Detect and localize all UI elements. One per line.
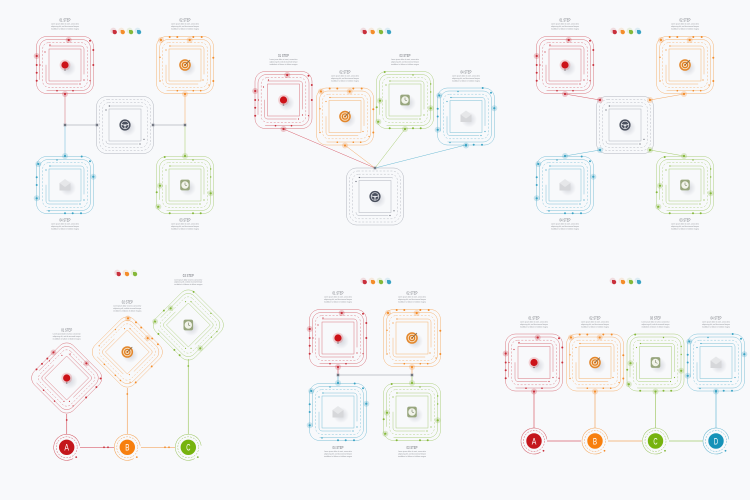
label 04: 04 STEP — [460, 69, 472, 74]
label 01: 01 STEP — [332, 290, 344, 295]
label 03: 03 STEP — [650, 315, 661, 320]
label 03: adipiscing elit, sed do eiusmod tempor — [398, 452, 426, 455]
label 02: Lorem ipsum dolor sit amet, consectetur — [398, 296, 426, 299]
label 02: incididunt ut labore et dolore magna — [171, 27, 200, 30]
label 04: incididunt ut labore et dolore magna — [51, 227, 80, 230]
label 02: adipiscing elit, sed do eiusmod tempor — [113, 307, 142, 310]
node B: B — [593, 436, 597, 447]
label 03: incididunt ut labore et dolore magna — [642, 325, 670, 328]
label 01: adipiscing elit, sed do eiusmod tempor — [53, 335, 81, 338]
step card 02 — [566, 334, 624, 394]
label 02: incididunt ut labore et dolore magna — [581, 325, 610, 328]
step card 01 — [252, 72, 313, 132]
label 04: Lorem ipsum dolor sit amet, consectetur — [324, 450, 352, 453]
label 03: adipiscing elit, sed do eiusmod tempor — [671, 225, 699, 228]
step card 02 — [384, 309, 441, 370]
node B — [110, 430, 145, 465]
label 01: Lorem ipsum dolor sit amet, consectetur — [551, 23, 579, 26]
legend marks — [360, 278, 391, 284]
label 01: 01 STEP — [528, 315, 540, 320]
label 02: Lorem ipsum dolor sit amet, consectetur — [581, 321, 609, 324]
label 03: Lorem ipsum dolor sit amet, consectetur — [174, 278, 203, 281]
label 03: adipiscing elit, sed do eiusmod tempor — [171, 225, 199, 228]
label 03: 03 STEP — [180, 217, 191, 222]
diamond step 01 — [27, 337, 106, 417]
panel: hub with diagonal links — [534, 17, 714, 230]
label 03: Lorem ipsum dolor sit amet, consectetur — [671, 223, 699, 226]
label 01: Lorem ipsum dolor sit amet, consectetur — [51, 23, 79, 26]
node B — [577, 423, 613, 459]
label 03: Lorem ipsum dolor sit amet, consectetur — [642, 321, 670, 324]
label 02: adipiscing elit, sed do eiusmod tempor — [581, 323, 609, 326]
label 01 — [324, 290, 353, 303]
step card 02 — [156, 36, 214, 97]
connectors — [534, 391, 716, 441]
label 01: incididunt ut labore et dolore magna — [53, 337, 82, 340]
label 01: adipiscing elit, sed do eiusmod tempor — [324, 298, 352, 301]
label 02: Lorem ipsum dolor sit amet, consectetur — [671, 23, 699, 26]
label 02 — [581, 315, 610, 328]
label 01: 01 STEP — [560, 17, 571, 22]
diamond step 02 — [88, 313, 167, 391]
step card 03 — [655, 153, 714, 214]
node A — [516, 423, 552, 459]
label 02: Lorem ipsum dolor sit amet, consectetur — [331, 75, 359, 78]
label 01: incididunt ut labore et dolore magna — [520, 325, 549, 328]
panel: four steps converging on hub — [252, 28, 497, 225]
connectors — [66, 359, 189, 448]
label 01 — [551, 17, 580, 30]
label 01 — [51, 17, 80, 30]
label 02: adipiscing elit, sed do eiusmod tempor — [171, 25, 199, 28]
label 04 — [324, 445, 353, 458]
hub card — [346, 168, 404, 225]
step card 04 — [435, 87, 497, 148]
label 03: 03 STEP — [183, 273, 194, 278]
label 04: 04 STEP — [560, 217, 571, 222]
legend marks — [360, 28, 391, 34]
label 01: adipiscing elit, sed do eiusmod tempor — [520, 323, 548, 326]
label 03: Lorem ipsum dolor sit amet, consectetur — [398, 450, 426, 453]
hub card — [596, 96, 654, 154]
connectors — [284, 129, 466, 170]
panel: row of steps with A B C D nodes — [503, 278, 747, 459]
label 03 — [391, 53, 420, 66]
label 04: Lorem ipsum dolor sit amet, consectetur — [702, 321, 730, 324]
label 02: 02 STEP — [122, 299, 133, 304]
label 03: incididunt ut labore et dolore magna — [671, 227, 700, 230]
legend marks — [110, 28, 141, 34]
node D: D — [714, 436, 718, 447]
label 03: incididunt ut labore et dolore magna — [391, 63, 420, 66]
label 02 — [331, 69, 360, 82]
label 02: incididunt ut labore et dolore magna — [398, 300, 427, 303]
step card 02 — [656, 36, 714, 97]
label 04 — [702, 315, 731, 328]
label 04: incididunt ut labore et dolore magna — [551, 227, 580, 230]
label 03: 03 STEP — [406, 445, 418, 450]
step card 03 — [155, 153, 214, 214]
connectors — [63, 94, 187, 156]
label 04: adipiscing elit, sed do eiusmod tempor — [452, 77, 480, 80]
label 01: Lorem ipsum dolor sit amet, consectetur — [520, 321, 548, 324]
step card 04 — [34, 153, 96, 214]
label 04: Lorem ipsum dolor sit amet, consectetur — [51, 223, 79, 226]
node A: A — [532, 436, 537, 447]
label 04: incididunt ut labore et dolore magna — [324, 455, 353, 458]
legend marks — [610, 28, 641, 34]
label 01: adipiscing elit, sed do eiusmod tempor — [270, 60, 298, 63]
label 03 — [398, 445, 427, 458]
label 02: 02 STEP — [590, 315, 601, 320]
label 03 — [174, 273, 203, 286]
label 02: 02 STEP — [340, 69, 351, 74]
hub card — [96, 96, 154, 154]
label 01: incididunt ut labore et dolore magna — [324, 300, 353, 303]
panel: hub with four corner steps — [34, 17, 214, 230]
node D — [698, 423, 734, 459]
label 01: adipiscing elit, sed do eiusmod tempor — [51, 25, 79, 28]
step card 04 — [534, 153, 596, 214]
label 03: incididunt ut labore et dolore magna — [171, 227, 200, 230]
node B: B — [125, 443, 129, 454]
step card 03 — [382, 380, 441, 441]
label 03: incididunt ut labore et dolore magna — [398, 455, 427, 458]
label 02: adipiscing elit, sed do eiusmod tempor — [331, 77, 359, 80]
label 03 — [642, 315, 670, 328]
label 02: Lorem ipsum dolor sit amet, consectetur — [113, 305, 142, 308]
label 04: 04 STEP — [60, 217, 71, 222]
label 03 — [171, 217, 200, 230]
label 03: 03 STEP — [400, 53, 411, 58]
label 02 — [113, 299, 142, 312]
label 01 — [53, 327, 82, 340]
label 03: incididunt ut labore et dolore magna — [174, 283, 203, 286]
label 02: 02 STEP — [680, 17, 691, 22]
label 04: Lorem ipsum dolor sit amet, consectetur — [452, 75, 480, 78]
label 02: adipiscing elit, sed do eiusmod tempor — [671, 25, 699, 28]
panel: rising diamonds with A B C nodes — [27, 270, 228, 465]
node C — [171, 430, 206, 465]
label 01: Lorem ipsum dolor sit amet, consectetur — [324, 296, 352, 299]
label 01: Lorem ipsum dolor sit amet, consectetur — [53, 333, 81, 336]
label 04: Lorem ipsum dolor sit amet, consectetur — [551, 223, 579, 226]
label 03: adipiscing elit, sed do eiusmod tempor — [391, 60, 419, 63]
label 02 — [671, 17, 700, 30]
step card 01 — [34, 36, 94, 97]
label 03: Lorem ipsum dolor sit amet, consectetur — [171, 223, 199, 226]
label 01: incididunt ut labore et dolore magna — [551, 27, 580, 30]
label 04: 04 STEP — [710, 315, 722, 320]
label 03: adipiscing elit, sed do eiusmod tempor — [642, 323, 670, 326]
connectors — [336, 367, 414, 383]
label 04: adipiscing elit, sed do eiusmod tempor — [51, 225, 79, 228]
label 02: adipiscing elit, sed do eiusmod tempor — [398, 298, 426, 301]
step card 01 — [534, 36, 594, 97]
step card 03 — [626, 334, 684, 394]
label 04: adipiscing elit, sed do eiusmod tempor — [551, 225, 579, 228]
label 04: incididunt ut labore et dolore magna — [702, 325, 731, 328]
label 02: incididunt ut labore et dolore magna — [331, 79, 360, 82]
step card 03 — [375, 71, 434, 132]
step card 01 — [307, 310, 367, 370]
label 01: 01 STEP — [60, 17, 71, 22]
label 02 — [398, 290, 427, 303]
label 04: adipiscing elit, sed do eiusmod tempor — [702, 323, 730, 326]
node A: A — [64, 443, 69, 454]
step card 02 — [316, 88, 374, 148]
label 01: 01 STEP — [278, 53, 289, 58]
label 03 — [671, 217, 700, 230]
label 03: Lorem ipsum dolor sit amet, consectetur — [391, 58, 419, 61]
label 01: 01 STEP — [61, 327, 72, 332]
label 03: adipiscing elit, sed do eiusmod tempor — [174, 281, 203, 284]
step card 04 — [685, 333, 747, 394]
label 02: 02 STEP — [406, 290, 418, 295]
label 01 — [520, 315, 549, 328]
label 04 — [452, 69, 481, 82]
panel: two by two grid of steps — [307, 278, 441, 458]
label 02 — [171, 17, 200, 30]
connectors — [565, 94, 684, 156]
label 04: 04 STEP — [332, 445, 344, 450]
label 02: incididunt ut labore et dolore magna — [671, 27, 700, 30]
label 04 — [551, 217, 580, 230]
label 01: incididunt ut labore et dolore magna — [51, 27, 80, 30]
label 04: adipiscing elit, sed do eiusmod tempor — [324, 452, 352, 455]
legend marks — [114, 270, 137, 276]
label 01 — [270, 53, 298, 66]
label 01: incididunt ut labore et dolore magna — [270, 63, 298, 66]
label 01: Lorem ipsum dolor sit amet, consectetur — [270, 58, 298, 61]
node A — [49, 430, 84, 465]
label 01: adipiscing elit, sed do eiusmod tempor — [551, 25, 579, 28]
label 02: 02 STEP — [180, 17, 191, 22]
label 04: incididunt ut labore et dolore magna — [452, 79, 481, 82]
label 02: incididunt ut labore et dolore magna — [113, 309, 142, 312]
label 04 — [51, 217, 80, 230]
label 02: Lorem ipsum dolor sit amet, consectetur — [171, 23, 199, 26]
node C: C — [653, 436, 658, 447]
diamond step 03 — [148, 285, 228, 365]
node C — [638, 423, 673, 459]
step card 01 — [503, 334, 563, 394]
node C: C — [186, 443, 190, 454]
step card 04 — [307, 380, 369, 441]
legend marks — [610, 278, 641, 284]
label 03: 03 STEP — [680, 217, 691, 222]
